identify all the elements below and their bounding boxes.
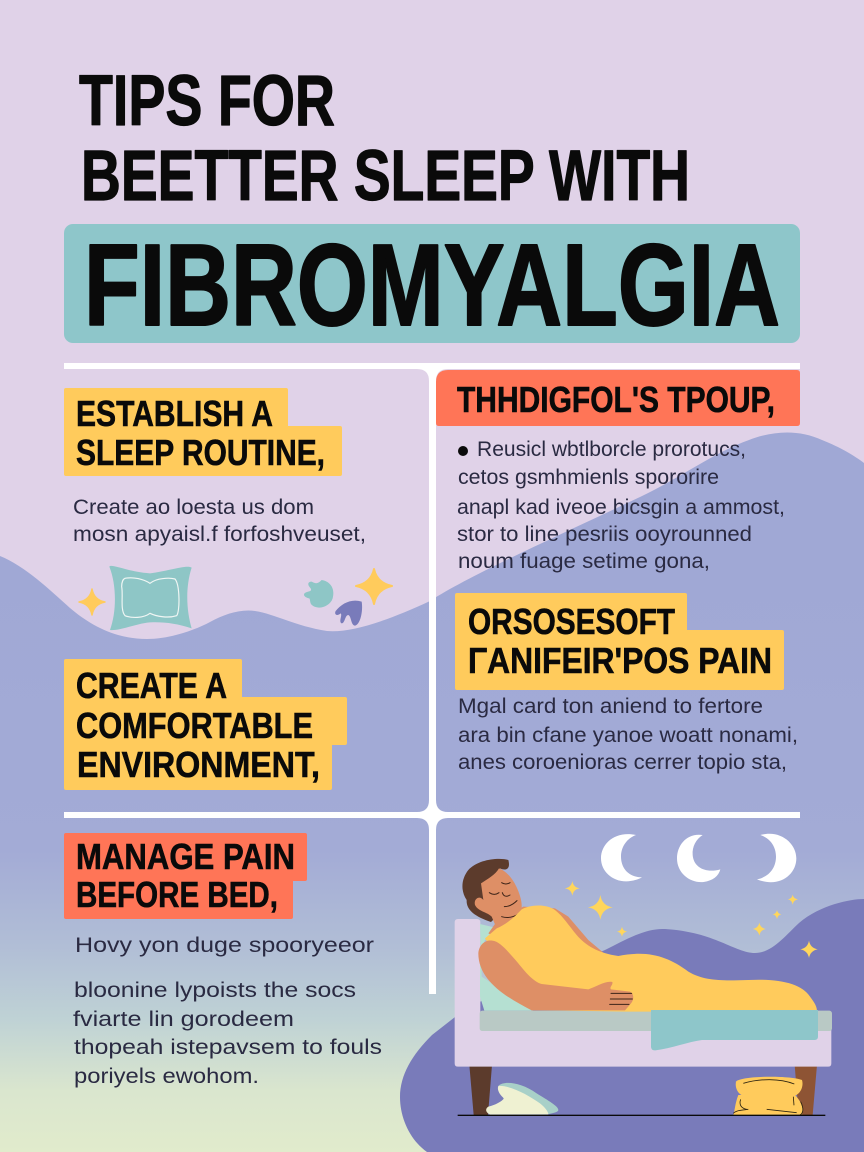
bed legs [469,1065,817,1115]
slippers and folded bag [486,1077,803,1115]
icon: teal leaf [304,580,333,608]
person and pillow [462,859,817,1012]
icon: sparkle stars [565,881,818,958]
title: BEETTER SLEEP WITH [81,137,690,216]
heading: create a comfortable environment: COMFORTABLE [76,705,313,746]
arm and hand [478,940,633,1010]
title: TIPS FOR [79,62,335,141]
mattress [480,1011,832,1031]
text block: bullet description: anapl kad iveoe bicsgin a ammost, [457,496,785,519]
text block: description: Mgal card ton aniend to fertore [458,695,763,718]
icon: purple leaf [335,601,362,626]
text block: pain description: fviarte lin gorodeem [73,1008,294,1031]
heading: orsosesoft [455,593,784,690]
text block: bullet description: cetos gsmhmienls spororire [458,466,719,489]
panel: establish a sleep routine [64,388,392,630]
heading: coral banner [436,370,800,426]
pillow [480,924,533,1011]
text block: pain description: thopeah istepavsem to fouls [74,1036,382,1059]
hair [462,859,509,922]
heading: establish a sleep routine [64,388,342,476]
finger lines [610,993,632,1004]
heading: establish a sleep routine: ESTABLISH A [76,393,273,434]
text block: bullet description: Reusicl wbtlborcle prorotucs, [477,438,746,461]
text block: pain description: poriyels ewohom. [74,1065,259,1088]
icon: pillow [109,566,192,630]
illustration: person sleeping in bed [455,834,832,1116]
heading: create a comfortable environment: CREATE A [76,665,227,706]
text block: routine description [73,496,366,546]
icon: small star [79,589,105,615]
heading: manage pain [64,833,307,919]
teal blanket fold [651,1010,818,1050]
heading: create a comfortable environment [64,659,347,790]
folded yellow bag [733,1077,803,1115]
heading: coral banner: THHDIGFOL'S TPOUP, [457,379,775,420]
neck and back arm [488,907,605,957]
text block: description: anes coroenioras cerrer topio sta, [458,751,787,774]
heading: orsosesoft: ORSOSESOFT [468,601,675,642]
text block: bullet description: noum fuage setime gona, [458,550,710,573]
text block: pain description: bloonine lypoists the socs [74,979,356,1002]
text block: description: ara bin cfane yanoe woatt nonami, [458,724,798,747]
heading: create a comfortable environment: ENVIRONMENT, [77,744,320,785]
text block: routine description: Create ao loesta us dom [73,496,314,519]
panel: manage pain before bed [64,833,382,1088]
background wave: periwinkle [0,432,864,1152]
title [79,62,690,216]
bed frame [455,919,831,1067]
text block: pain description [73,979,382,1088]
panel: top right tips [436,370,800,573]
background wave: dark purple hill [400,899,864,1152]
text block: routine description: mosn apyaisl.f forfoshveuset, [73,523,366,546]
icon: bullet [458,446,468,456]
heading: manage pain: MANAGE PAIN [76,836,295,877]
text block: bullet description [457,438,785,573]
grid dividers [64,363,800,994]
heading: establish a sleep routine: SLEEP ROUTINE, [76,432,325,473]
heading: manage pain: BEFORE BED, [76,874,278,915]
floor line [458,1115,825,1116]
text block: pain intro: Hovy yon duge spooryeeor [75,934,374,957]
icon: three moons [601,834,796,882]
face [475,868,522,928]
yellow blanket [485,906,817,1012]
facial features [489,883,518,918]
panel: middle right tip [455,593,798,774]
icon: large star [356,569,392,604]
text block: description [458,695,798,774]
slipper [486,1083,558,1115]
text block: bullet description: stor to line pesriis ooyrounned [457,523,752,546]
heading: orsosesoft: ΓANIFEIR'POS PAIN [468,640,772,681]
